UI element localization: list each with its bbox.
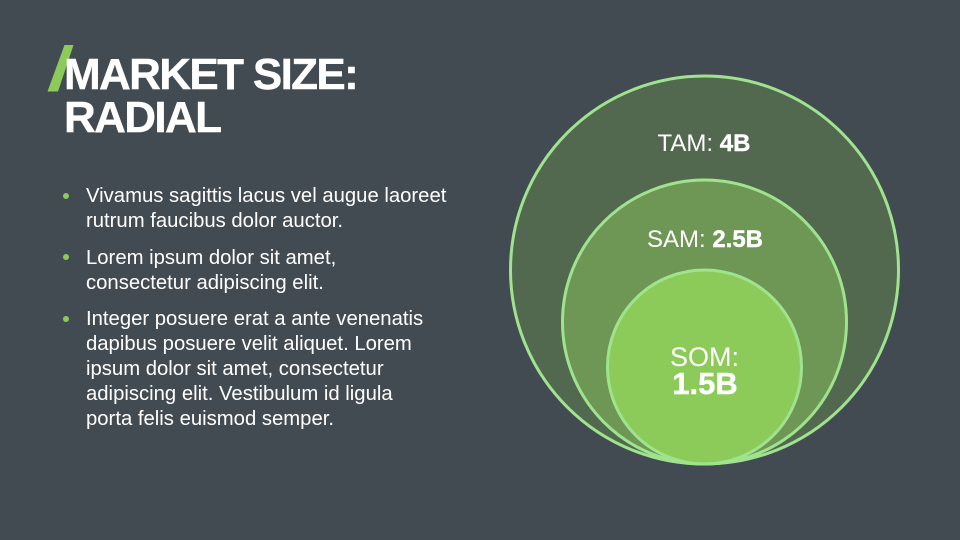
circle: TAM (510, 76, 898, 464)
bullet 3: porta felis euismod semper. (86, 408, 334, 430)
title: RADIAL (64, 93, 220, 142)
title (64, 50, 357, 142)
circle: SOM (608, 270, 802, 464)
circle: SAM (562, 180, 846, 464)
title: MARKET SIZE: (64, 50, 357, 99)
circle: SAM: SAM: 2.5B (647, 226, 763, 253)
bullet 3: Integer posuere erat a ante venenatis (86, 308, 423, 330)
bullet 3: dapibus posuere velit aliquet. Lorem (86, 333, 412, 355)
bullet list (63, 185, 446, 430)
bullet 2 (63, 247, 336, 294)
bullet 3: ipsum dolor sit amet, consectetur (86, 358, 384, 380)
bullet 1 (63, 185, 446, 232)
bullet 2: consectetur adipiscing elit. (86, 272, 324, 294)
bullet 3: adipiscing elit. Vestibulum id ligula (86, 383, 393, 405)
bullet 1: rutrum faucibus dolor auctor. (86, 210, 343, 232)
bullet 3 (63, 308, 423, 430)
circle: SOM: SOM: (670, 342, 739, 372)
bullet 2: Lorem ipsum dolor sit amet, (86, 247, 336, 269)
bullet 1: Vivamus sagittis lacus vel augue laoreet (86, 185, 446, 207)
circle: TAM: TAM: 4B (658, 130, 750, 157)
icon: title slash accent (48, 45, 74, 92)
circle: SOM: 1.5B (672, 366, 738, 401)
